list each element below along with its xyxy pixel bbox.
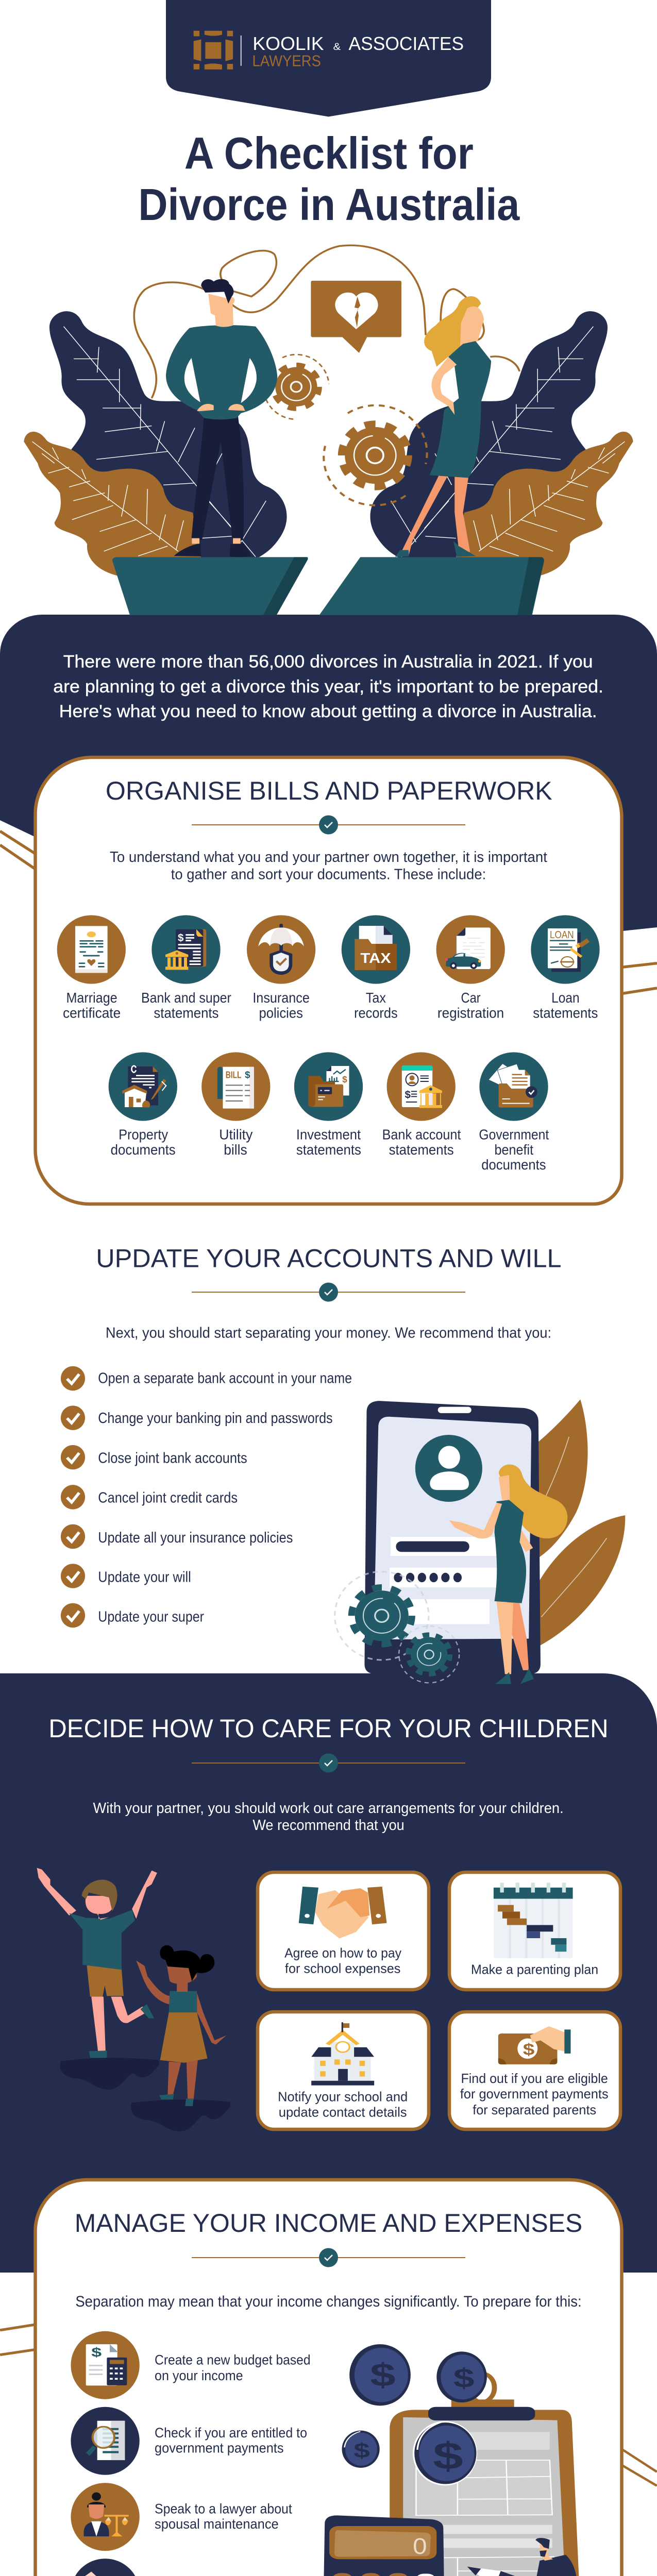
dress: [429, 341, 491, 478]
checklist text: Update your will: [98, 1569, 191, 1585]
panel: manage income and expenses: [35, 2180, 621, 2576]
logo mark: [194, 31, 233, 70]
firm name: KOOLIK: [252, 33, 324, 54]
document labels: [63, 990, 598, 1173]
document labels: documents: [481, 1157, 546, 1173]
icon: tax records: TAX: [360, 950, 391, 966]
coins: [342, 2344, 487, 2485]
gears on phone: [335, 1572, 459, 1683]
heading: ORGANISE BILLS AND PAPERWORK: [106, 776, 552, 806]
leaves behind phone: [536, 1399, 625, 1646]
coins: $: [353, 2439, 370, 2462]
icon: loan statements: LOAN: [550, 929, 574, 941]
man figure: [166, 279, 277, 557]
icon: property documents: [109, 1052, 177, 1121]
document labels: registration: [437, 1005, 504, 1021]
icon: car registration: [436, 915, 505, 984]
card: government payments: for government payments: [460, 2087, 609, 2102]
document labels: statements: [296, 1142, 361, 1158]
card: parenting plan: [471, 1883, 598, 1977]
left broken pot: [112, 557, 308, 615]
document labels: Utility: [219, 1127, 253, 1143]
logo: [194, 31, 464, 70]
list text: government payments: [155, 2441, 283, 2456]
paragraph: Next, you should start separating your money. We recommend that you:: [106, 1325, 551, 1341]
coins: $: [370, 2357, 396, 2393]
icon: utility bills: BILL: [226, 1069, 241, 1080]
left leaves: [24, 311, 287, 575]
woman at phone: [449, 1465, 567, 1684]
divider: children: [192, 1754, 465, 1772]
left stripes: manage: [0, 2325, 35, 2355]
gear small: [264, 354, 329, 419]
card: agree on school expenses: [284, 1887, 401, 1976]
card: notify school: Notify your school and: [278, 2090, 408, 2104]
face: [460, 307, 484, 349]
document labels: statements: [154, 1005, 218, 1021]
hair: [424, 296, 481, 367]
document labels: Loan: [551, 990, 580, 1006]
title: Divorce in Australia: [138, 180, 520, 230]
neck and face: [208, 294, 233, 327]
logo: ASSOCIATES: [349, 33, 464, 54]
document labels: Bank account: [382, 1127, 461, 1143]
header badge: [166, 0, 491, 117]
right stripes: [622, 963, 657, 994]
boy: [37, 1868, 157, 2058]
clipboard: [390, 2374, 582, 2576]
divider: accounts: [192, 1283, 465, 1301]
heading: UPDATE YOUR ACCOUNTS AND WILL: [96, 1244, 562, 1273]
card: government payments: $: [523, 2040, 534, 2058]
sweater: [166, 325, 277, 419]
organise section: [0, 652, 657, 994]
checklist text: Close joint bank accounts: [98, 1450, 247, 1466]
intro text: There were more than 56,000 divorces in Australia in 2021. If you: [63, 652, 593, 671]
title: [138, 129, 520, 230]
right broken pot: [319, 557, 544, 615]
card: government payments: [460, 2026, 609, 2117]
document labels: certificate: [63, 1005, 121, 1021]
list text: Check if you are entitled to: [155, 2425, 307, 2441]
hands: [197, 404, 245, 411]
icon: investment statements: [294, 1052, 363, 1121]
coins: $: [453, 2364, 475, 2393]
document labels: documents: [111, 1142, 176, 1158]
heels: [395, 541, 476, 557]
card: notify school: [278, 2022, 408, 2120]
calculator: 0: [413, 2534, 427, 2559]
speech bubble with broken heart: [311, 281, 401, 353]
document labels: Investment: [296, 1127, 361, 1143]
gear large: [324, 405, 427, 505]
man with pencil: [467, 2538, 609, 2576]
title: A Checklist for: [184, 129, 474, 179]
icon: marriage certificate: [57, 915, 126, 984]
pants: [192, 416, 244, 540]
card: parenting plan: Make a parenting plan: [471, 1962, 598, 1977]
document labels: records: [354, 1005, 398, 1021]
document labels: Bank and super: [141, 990, 231, 1006]
divider: manage: [192, 2248, 465, 2267]
intro text: are planning to get a divorce this year, it's important to be prepared.: [53, 676, 603, 697]
shoes: [174, 544, 251, 557]
children content: [0, 1868, 609, 2355]
document labels: statements: [389, 1142, 454, 1158]
avatar: [415, 1435, 482, 1502]
paragraph: children: With your partner, you should work out care arrangements for your children.: [93, 1800, 564, 1817]
icon: government benefit documents: [479, 1052, 548, 1121]
icon: tax records: [342, 915, 410, 984]
checklist: [61, 1366, 352, 1628]
list icon: budget: [71, 2331, 140, 2399]
checklist text: Open a separate bank account in your name: [98, 1370, 352, 1386]
icon: utility bills: [201, 1052, 270, 1121]
document labels: Property: [119, 1127, 169, 1143]
checklist text: Update all your insurance policies: [98, 1530, 293, 1546]
panel: organise bills and paperwork: [35, 757, 621, 1204]
card frames: children: [258, 1872, 620, 2129]
divider: organise: [192, 815, 465, 835]
hair: [201, 279, 233, 303]
children section navy background: [0, 1673, 657, 2273]
boy platform: [60, 2058, 159, 2090]
list text: on your income: [155, 2368, 243, 2384]
woman figure: [395, 296, 491, 557]
paragraph: [110, 849, 548, 883]
list icon: lawyer: [71, 2483, 140, 2551]
heading: children: DECIDE HOW TO CARE FOR YOUR CHILDREN: [48, 1714, 609, 1743]
icon: loan statements: [531, 915, 600, 984]
document labels: benefit: [495, 1142, 533, 1158]
section: update your accounts and will: [48, 1244, 625, 1834]
intro text: [53, 652, 603, 721]
card: government payments: for separated parents: [473, 2103, 596, 2117]
lawyers: LAWYERS: [252, 52, 321, 70]
checklist text: Update your super: [98, 1609, 204, 1625]
document labels: Marriage: [66, 990, 117, 1006]
coins: $: [433, 2434, 463, 2478]
checklist text: Cancel joint credit cards: [98, 1490, 238, 1506]
connecting thread: [134, 245, 519, 398]
icon: investment statements: $: [342, 1074, 347, 1084]
document labels: policies: [259, 1005, 303, 1021]
list text: spousal maintenance: [155, 2517, 279, 2532]
icon: bank and super statements: $: [178, 932, 184, 944]
paragraph: to gather and sort your documents. These include:: [171, 866, 486, 883]
manage content: [66, 2331, 657, 2576]
girl: [136, 1945, 226, 2106]
card: agree on school expenses: Agree on how to pay: [284, 1946, 401, 1961]
document labels: Car: [461, 990, 481, 1006]
left stripes: [0, 831, 35, 869]
legs: [397, 473, 470, 557]
organise panel contents: [63, 776, 598, 1173]
card: notify school: update contact details: [279, 2105, 407, 2120]
form fields: [391, 1537, 499, 1556]
paragraph: children: [93, 1800, 564, 1834]
list icon: government payments: [71, 2407, 140, 2475]
girl platform: [131, 2099, 230, 2131]
paragraph: To understand what you and your partner own together, it is important: [110, 849, 548, 866]
list text: Speak to a lawyer about: [155, 2501, 292, 2517]
list text: Create a new budget based: [155, 2352, 311, 2368]
document labels: bills: [224, 1142, 247, 1158]
intro text: Here's what you need to know about getting a divorce in Australia.: [59, 701, 597, 721]
card: government payments: Find out if you are eligible: [461, 2072, 608, 2086]
hero area: [24, 0, 633, 615]
icon: bank and super statements: [151, 915, 221, 984]
right stripes: manage: [622, 2449, 657, 2486]
intro navy background: [0, 615, 657, 933]
document labels: Insurance: [252, 990, 310, 1006]
checklist text: [98, 1370, 352, 1625]
phone: [364, 1401, 541, 1674]
calculator: [323, 2515, 445, 2576]
arm: [432, 357, 457, 415]
list icon: budget: $: [91, 2345, 102, 2360]
icon: bank account statements: $: [405, 1089, 411, 1101]
document labels: Government: [479, 1127, 549, 1143]
list text: [155, 2352, 311, 2576]
logo divider: [241, 36, 242, 66]
right leaves: [370, 311, 633, 575]
logo: &: [333, 42, 341, 53]
paragraph: children: We recommend that you: [252, 1817, 405, 1834]
checklist text: Change your banking pin and passwords: [98, 1411, 333, 1427]
icon: insurance policies: [247, 915, 315, 984]
icon: utility bills: $: [245, 1069, 250, 1080]
document labels: statements: [533, 1005, 598, 1021]
document labels: Tax: [366, 990, 386, 1006]
icon: bank account statements: [387, 1052, 456, 1121]
card: agree on school expenses: for school expenses: [285, 1961, 400, 1976]
list icon: debts help: [71, 2558, 140, 2576]
